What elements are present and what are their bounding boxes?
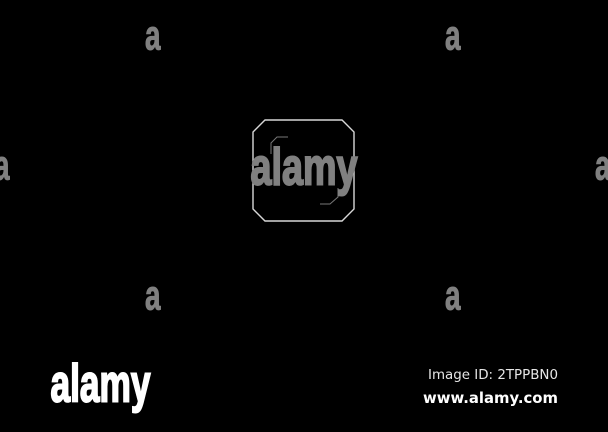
watermark: small letter marks: a <box>445 12 461 58</box>
image id text: Image ID: 2TPPBN0 <box>428 367 558 383</box>
website text: www.alamy.com <box>423 389 558 407</box>
icon: inner corner brackets <box>271 137 338 204</box>
watermark: small letter marks <box>0 12 608 318</box>
watermark: small letter marks: a <box>145 12 161 58</box>
bottom logo: alamy <box>50 354 151 414</box>
watermark: small letter marks: a <box>145 272 161 318</box>
watermark: small letter marks: a <box>445 272 461 318</box>
center watermark logo: alamy <box>250 138 358 196</box>
icon: octagon frame <box>253 120 354 221</box>
